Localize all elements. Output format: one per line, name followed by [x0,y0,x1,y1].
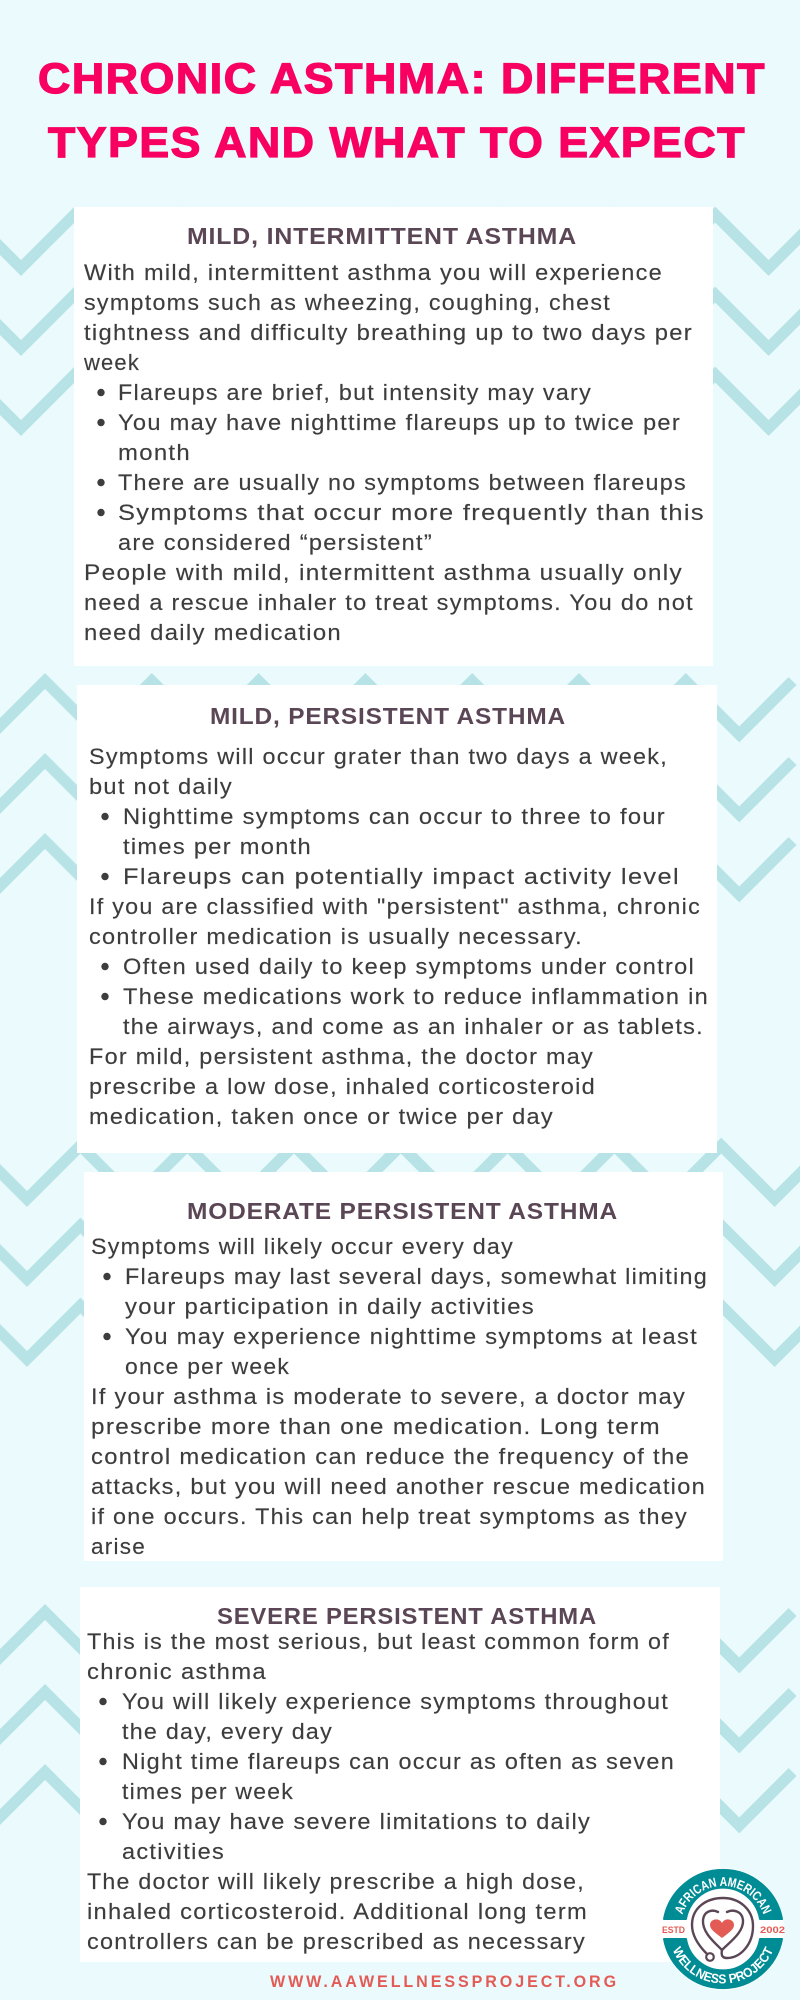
panel: mild, intermittent asthma [74,207,713,666]
bullet list: Symptoms that occur more frequently than this [118,500,705,525]
text block: intro: symptoms such as wheezing, coughing, chest [84,290,611,315]
text block: frequency: Symptoms will occur grater than two days a week, [89,744,668,769]
bullet list: activities [122,1839,225,1864]
text block: treatment: If your asthma is moderate to severe, a doctor may [91,1384,686,1409]
text block: intro [83,260,693,375]
website url: WWW.AAWELLNESSPROJECT.ORG [270,1973,619,1991]
text block: treatment: need daily medication [84,620,342,645]
bullet list: medication: These medications work to reduce inflammation in [123,984,709,1009]
text block: treatment: inhaled corticosteroid. Additional long term [87,1899,588,1924]
text block: intro: tightness and difficulty breathing up to two days per [84,320,693,345]
text block: treatment: For mild, persistent asthma, the doctor may [89,1044,594,1069]
text block: controller medication: If you are classified with "persistent" asthma, chronic [89,894,701,919]
heading: moderate persistent asthma: MODERATE PERSISTENT ASTHMA [187,1198,618,1224]
bullet list: medication: the airways, and come as an inhaler or as tablets. [123,1014,704,1039]
text block: controller medication [89,894,701,949]
text block: treatment [89,1044,596,1129]
text block: intro: chronic asthma [87,1659,267,1684]
text block: treatment: People with mild, intermittent asthma usually only [84,560,683,585]
text block: frequency [89,744,668,799]
bullet list: medication [101,954,709,1039]
bullet list: You may have nighttime flareups up to twice per [118,410,681,435]
heading: severe persistent asthma: SEVERE PERSISTENT ASTHMA [217,1603,597,1629]
heading: mild, persistent asthma: MILD, PERSISTENT ASTHMA [210,703,566,729]
bullet list: symptoms: Flareups can potentially impact activity level [123,864,680,889]
bullet list: are considered “persistent” [118,530,433,555]
bullet list: times per week [122,1779,294,1804]
title [38,56,766,167]
text block: treatment [87,1869,588,1954]
bullet list: Flareups may last several days, somewhat limiting [125,1264,708,1289]
text block: intro: week [83,350,140,375]
bullet list: You may experience nighttime symptoms at least [125,1324,698,1349]
text block: frequency: Symptoms will likely occur every day [91,1234,514,1259]
bullet list: There are usually no symptoms between flareups [118,470,687,495]
text block: treatment: The doctor will likely prescribe a high dose, [87,1869,585,1894]
text block: treatment: prescribe more than one medication. Long term [91,1414,661,1439]
text block: treatment: prescribe a low dose, inhaled corticosteroid [89,1074,596,1099]
bullet list: You may have severe limitations to daily [122,1809,591,1834]
bullet list: symptoms: times per month [123,834,312,859]
bullet list: symptoms: Nighttime symptoms can occur to three to four [123,804,666,829]
panel: mild, persistent asthma [77,685,717,1153]
text block: treatment: control medication can reduce the frequency of the [91,1444,690,1469]
title: CHRONIC ASTHMA: DIFFERENT [38,56,766,103]
bullet list: Night time flareups can occur as often as seven [122,1749,675,1774]
text block: treatment: if one occurs. This can help treat symptoms as they [91,1504,688,1529]
bullet list: your participation in daily activities [125,1294,535,1319]
logo badge: African American Wellness Project: 2002 [760,1925,785,1936]
logo badge: African American Wellness Project: ESTD [662,1925,685,1936]
text block: treatment: need a rescue inhaler to treat symptoms. You do not [84,590,694,615]
logo badge: African American Wellness Project: AFRICAN AMERICAN [675,1877,772,1914]
title: TYPES AND WHAT TO EXPECT [48,120,746,167]
bullet list: You will likely experience symptoms throughout [122,1689,669,1714]
panel: severe persistent asthma [80,1587,720,1962]
text block: intro [87,1629,670,1684]
bullet list: medication: Often used daily to keep symptoms under control [123,954,695,979]
text block: treatment: attacks, but you will need another rescue medication [91,1474,706,1499]
panel: moderate persistent asthma [84,1172,723,1561]
text block: treatment: arise [91,1534,146,1559]
bullet list [103,1264,708,1379]
text block: treatment: controllers can be prescribed as necessary [87,1929,586,1954]
text block: treatment: medication, taken once or twice per day [89,1104,554,1129]
bullet list [99,1689,675,1864]
logo badge: African American Wellness Project: WELLNESS PROJECT [673,1946,772,1984]
text block: frequency: but not daily [89,774,233,799]
bullet list: once per week [125,1354,290,1379]
text block: intro: This is the most serious, but least common form of [87,1629,670,1654]
bullet list: symptoms [101,804,680,889]
text block: treatment [91,1384,706,1559]
bullet list: the day, every day [122,1719,333,1744]
bullet list: month [118,440,191,465]
text block: intro: With mild, intermittent asthma you will experience [84,260,663,285]
logo badge: African American Wellness Project [662,1868,785,1990]
text block: treatment [84,560,694,645]
bullet list: Flareups are brief, but intensity may vary [118,380,592,405]
text block: controller medication: controller medication is usually necessary. [89,924,583,949]
icon: stethoscope with heart [692,1898,753,1961]
heading: mild, intermittent asthma: MILD, INTERMITTENT ASTHMA [187,223,577,249]
bullet list [97,380,705,555]
